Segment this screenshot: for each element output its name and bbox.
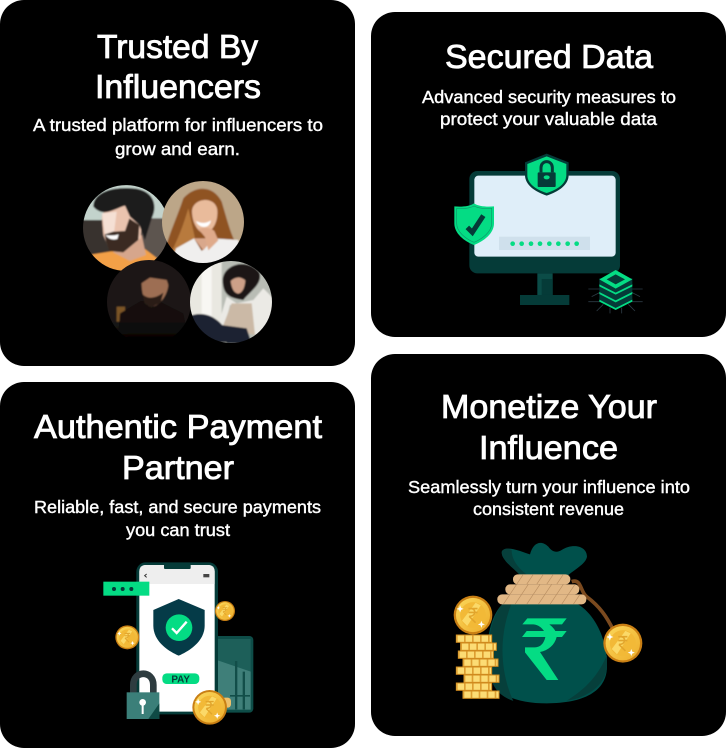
illustration: secure monitor (454, 154, 643, 313)
heading: monetize your influence (441, 388, 657, 466)
heading: authentic payment partner (34, 408, 322, 486)
panel: monetize your influence (371, 354, 726, 736)
illustration: money bag with coins (454, 543, 642, 703)
icon: check shield (454, 203, 494, 245)
illustration: secure phone payment (103, 562, 253, 725)
text: security description: protect your valuable data (440, 109, 657, 129)
influencer photo: man in orange shirt (83, 185, 167, 271)
influencer photo: woman in white shirt (190, 261, 272, 343)
pay button (162, 673, 199, 686)
influencer photo: smiling woman (160, 180, 247, 265)
text: payments description: Reliable, fast, and secure payments (34, 497, 321, 517)
heading: trusted by influencers: Trusted By (97, 28, 258, 65)
monitor stand (520, 273, 569, 305)
text: security description (422, 87, 676, 129)
heading: trusted by influencers (95, 28, 261, 105)
coin: hanging (603, 624, 642, 663)
text: payments description: you can trust (126, 520, 230, 540)
coin: on stack (454, 596, 492, 634)
heading: trusted by influencers: Influencers (95, 68, 261, 105)
monitor screen (469, 171, 620, 273)
padlock (127, 674, 159, 719)
text: trusted platform description: A trusted platform for influencers to (33, 115, 323, 135)
money bag (487, 543, 607, 703)
icon: server stack (588, 270, 643, 313)
coin stack (456, 635, 499, 698)
rupee symbol (522, 618, 567, 680)
password tag (103, 582, 149, 596)
heading: monetize your influence: Monetize Your (441, 388, 657, 425)
heading: secured data: Secured Data (445, 38, 654, 75)
influencer photo: man in dark shirt (107, 260, 190, 337)
text: security description: Advanced security measures to (422, 87, 676, 107)
text: trusted platform description (33, 115, 323, 159)
bank card (203, 636, 253, 713)
phone (136, 562, 218, 714)
panel: trusted by influencers (0, 0, 355, 366)
icon: lock shield (525, 154, 569, 196)
icon: payment shield (153, 599, 205, 656)
text: monetize description: Seamlessly turn your influence into (408, 477, 690, 497)
text: payments description (34, 497, 321, 540)
rope (497, 574, 586, 604)
heading: monetize your influence: Influence (479, 429, 618, 466)
text: monetize description: consistent revenue (473, 499, 624, 519)
heading: authentic payment partner: Partner (122, 449, 234, 486)
text: trusted platform description: grow and earn. (115, 139, 240, 159)
pay button: PAY (171, 675, 190, 686)
coins (115, 601, 235, 725)
text: monetize description (408, 477, 690, 519)
panel: authentic payment partner (0, 382, 355, 748)
bag string (572, 581, 613, 630)
panel: secured data (371, 12, 726, 337)
password field (499, 237, 590, 250)
heading: authentic payment partner: Authentic Payment (34, 408, 322, 445)
